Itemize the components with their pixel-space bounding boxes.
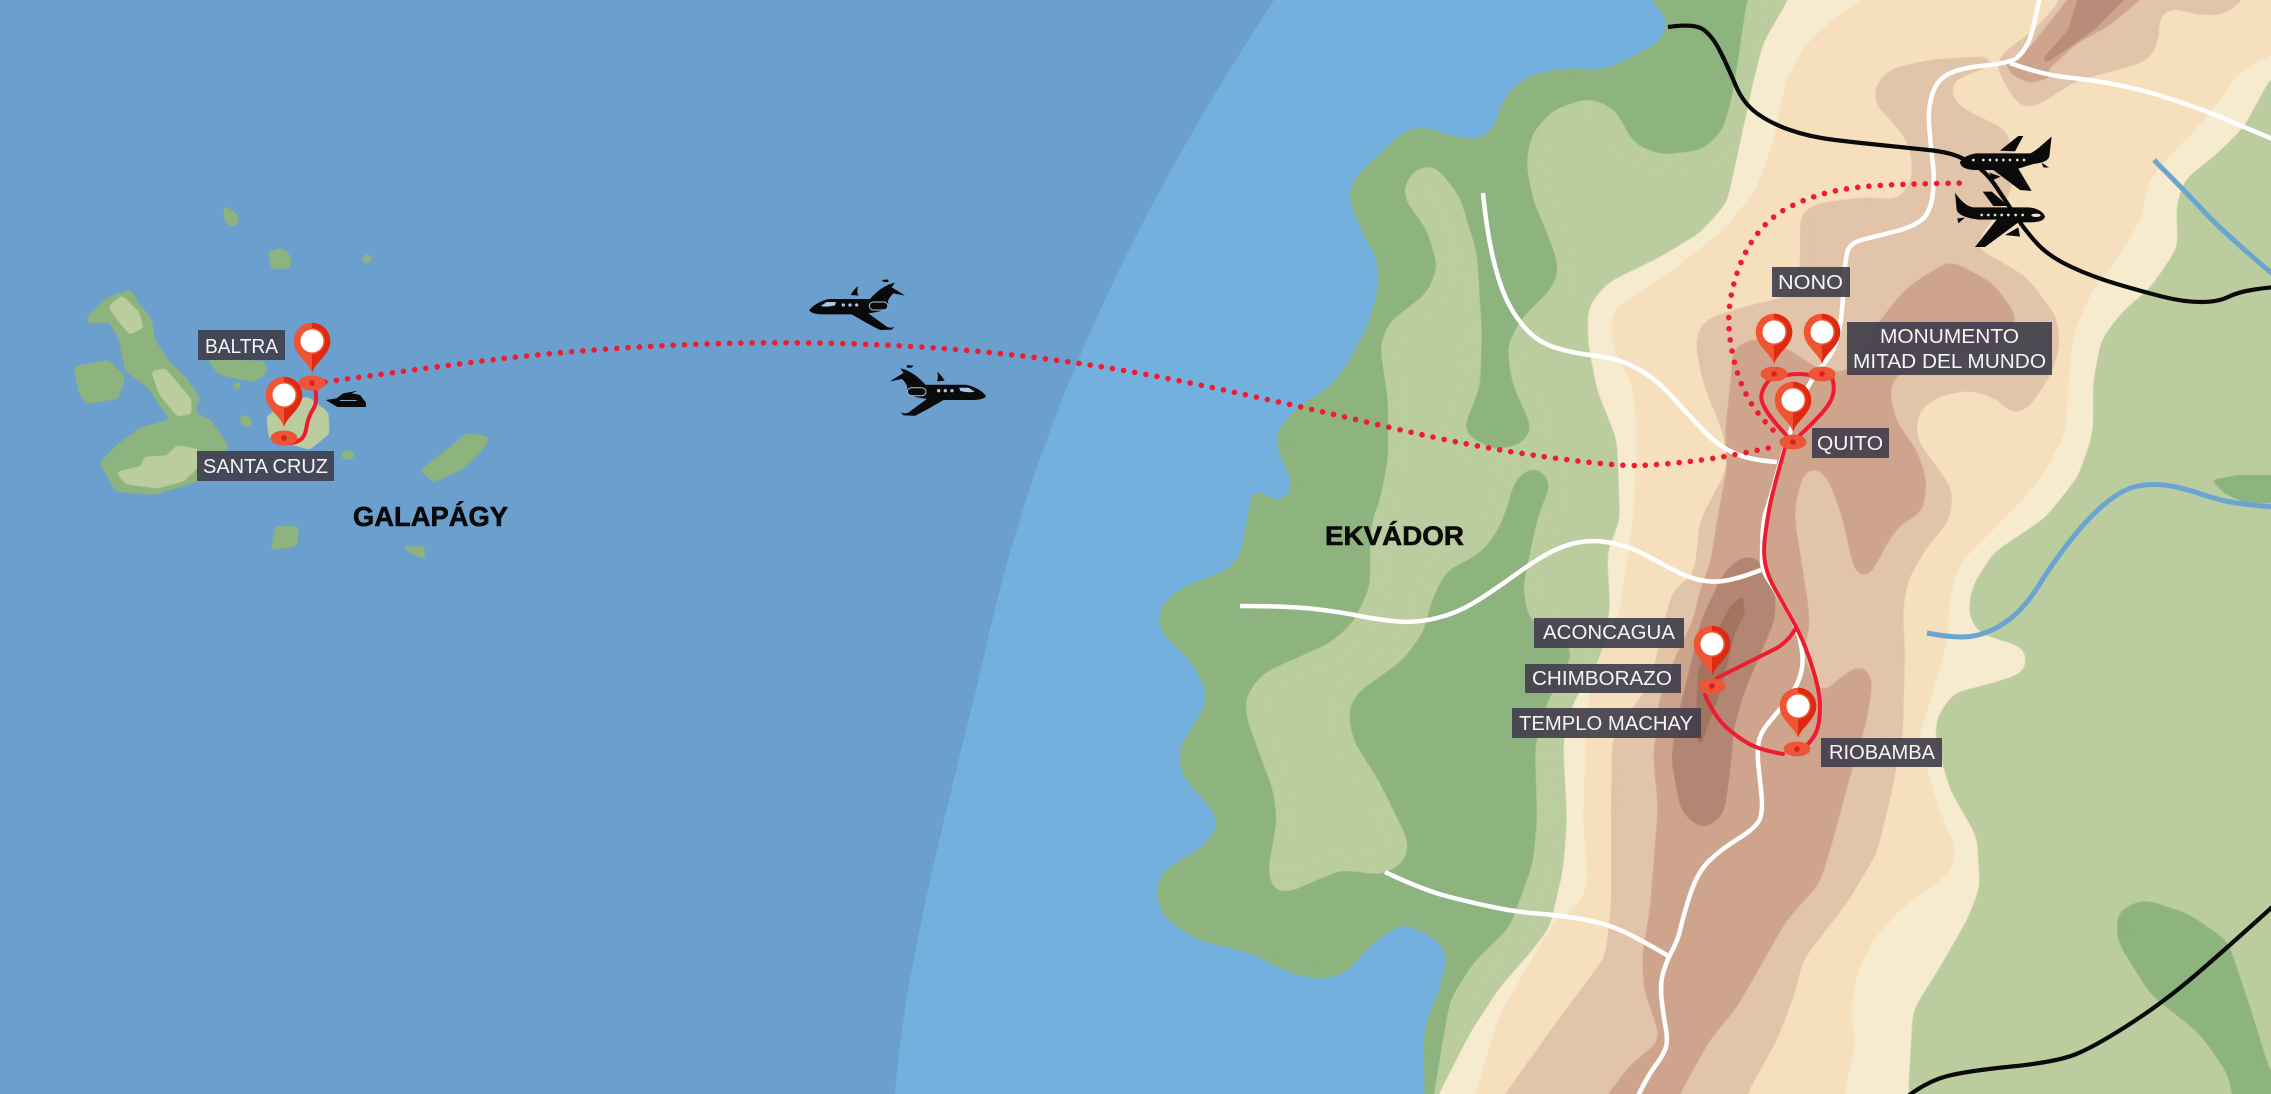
marker: Quito [1775, 382, 1811, 449]
marker: Santa Cruz [266, 377, 302, 445]
roads: white highways [1240, 0, 2271, 1094]
map: Galapagos islands [76, 208, 487, 557]
icon: yacht [326, 391, 366, 407]
label: Baltra: BALTRA [205, 336, 279, 358]
label: Aconcagua [1534, 618, 1684, 648]
label: Templo Machay: TEMPLO MACHAY [1519, 713, 1693, 735]
label: Riobamba [1821, 738, 1942, 767]
label: Chimborazo: CHIMBORAZO [1532, 668, 1672, 690]
flight route: dotted line Quito to international airport [1729, 183, 1967, 430]
rivers [1927, 160, 2271, 637]
marker: Nono [1756, 314, 1792, 381]
label: Santa Cruz: SANTA CRUZ [203, 456, 328, 478]
heading: Ecuador country name: EKVÁDOR [1325, 520, 1464, 551]
icon: private jet heading west [809, 279, 905, 330]
label: Aconcagua: ACONCAGUA [1543, 622, 1676, 644]
label: Monumento Mitad del Mundo: MONUMENTO [1880, 326, 2019, 348]
marker: Monumento Mitad del Mundo [1804, 314, 1840, 381]
label: Monumento Mitad del Mundo: MITAD DEL MUNDO [1853, 351, 2046, 373]
icon: airliner heading east [1955, 192, 2045, 247]
label: Monumento Mitad del Mundo [1847, 322, 2052, 375]
ocean: coastal shelf [895, 0, 2271, 1094]
label: Templo Machay [1512, 708, 1701, 738]
map: mainland Ecuador terrain [1155, 0, 2271, 1094]
label: Chimborazo [1525, 664, 1681, 693]
label: Quito: QUITO [1817, 433, 1883, 455]
marker: Chimborazo area [1694, 626, 1730, 693]
label: Riobamba: RIOBAMBA [1829, 742, 1936, 764]
flight route: dotted line Galapagos to Quito [325, 343, 1773, 466]
borders: black lines [1668, 26, 2271, 1094]
ground route: red lines [290, 374, 1834, 754]
marker: Riobamba [1780, 688, 1816, 756]
label: Baltra [198, 330, 285, 360]
label: Nono [1772, 267, 1850, 297]
heading: Galápagos region name: GALAPÁGY [353, 501, 508, 532]
label: Nono: NONO [1778, 272, 1843, 294]
icon: private jet heading east [890, 365, 986, 416]
marker: Baltra [294, 323, 330, 390]
label: Quito [1812, 428, 1889, 458]
label: Santa Cruz [197, 451, 334, 481]
icon: airliner heading west [1960, 136, 2052, 191]
